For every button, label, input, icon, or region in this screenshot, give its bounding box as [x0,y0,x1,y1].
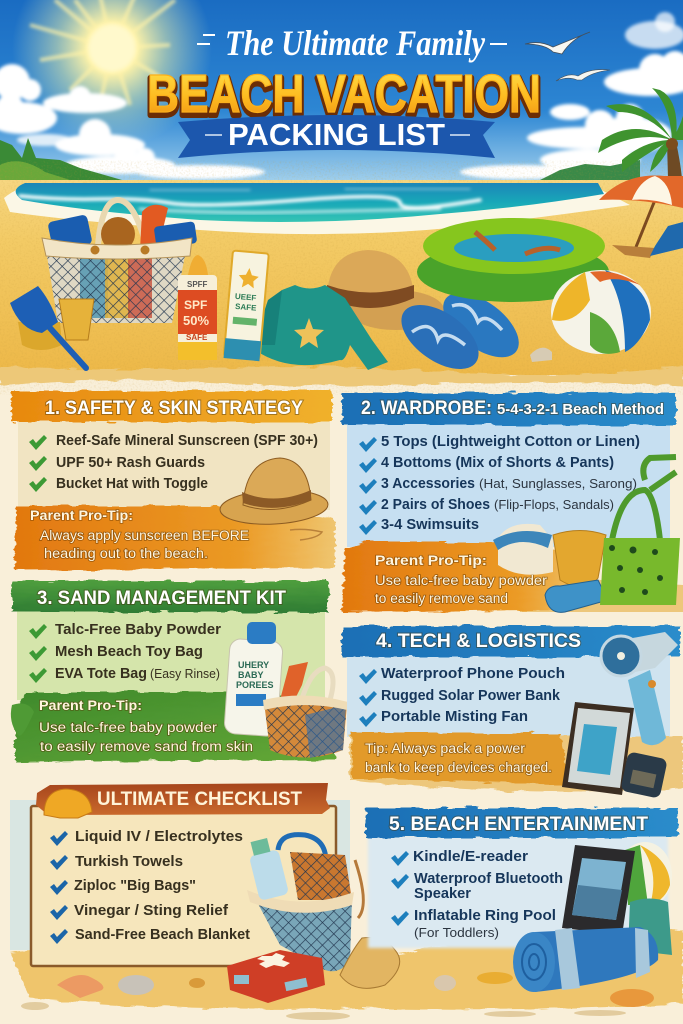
checklist: 3 Accessories [381,476,475,492]
icon: sunscreen bottle SPF 50: 50% [183,313,209,328]
checklist: Vinegar / Sting Relief [74,903,228,919]
heading plank: ULTIMATE CHECKLIST [97,789,302,810]
checklist: 3-4 Swimsuits [381,517,479,533]
icon: green tote bag [600,457,680,605]
icon: rolled towel tube [545,580,608,612]
icon: teal rash guard with star [253,285,388,370]
icon: bucket hat [219,458,329,540]
checklist: Speaker [414,886,471,902]
icon: baby powder bottle: UHERY [238,660,269,670]
icon: baby powder bottle: POREES [236,680,274,690]
panel: ultimate checklist [10,783,400,1003]
icon: sunscreen bottle SPF 50: SPFF [187,280,208,289]
icon: mesh bag with bottle [247,835,363,971]
icon: sun [12,0,212,148]
heading bar [366,808,678,838]
island left [0,138,122,180]
heading bar: 3. SAND MANAGEMENT KIT [37,588,286,609]
icon: seagull large [525,32,590,54]
icon: inflatable ring pool [417,218,609,302]
checklist: Sand-Free Beach Blanket [75,927,250,943]
icon: sunscreen bottle SPF 50 [178,255,217,360]
waves [20,189,480,213]
checklist: Kindle/E-reader [413,849,528,865]
checklist: 4 Bottoms (Mix of Shorts & Pants) [381,455,614,471]
beach items row [10,200,651,382]
checklist: Talc-Free Baby Powder [55,622,221,638]
icon: blue shovel and yellow buckets [10,286,94,368]
icon: rolled blue towel [513,927,658,992]
icon: beach umbrella and chair [599,176,683,258]
checklist: Ziploc "Big Bags" [74,878,196,894]
tip text [39,697,253,754]
tip text: Use talc-free baby powder [39,720,218,735]
checklist: 5 Tops (Lightweight Cotton or Linen) [381,434,640,450]
heading bar: 2. WARDROBE: [361,398,492,419]
bottom sand strip [10,929,683,1009]
blue back edge [10,800,350,950]
banner: packing list: PACKING LIST [228,117,445,152]
checklist [29,433,318,492]
tip text: bank to keep devices charged. [365,760,552,775]
background: sky [0,0,683,184]
tip box [342,542,683,612]
checklist [359,434,640,535]
checklist: Reef-Safe Mineral Sunscreen (SPF 30+) [56,433,318,449]
icon: orange shells and pebbles [434,972,654,1007]
icon: solar power bank [620,751,668,799]
panel body [347,655,670,737]
icon: scallop shell [44,789,92,818]
checklist: Liquid IV / Electrolytes [75,829,243,845]
tip text: heading out to the beach. [44,546,208,561]
icon: misting fan [601,632,678,745]
panel: 3 sand management kit [11,581,348,762]
tip text: Parent Pro-Tip: [30,507,133,523]
clouds right [460,12,683,179]
icon: small shells and pebble [57,975,205,998]
icon: baby powder bottle [224,622,283,737]
panel: 5 beach entertainment [366,808,678,1007]
checklist [359,666,565,727]
checklist [391,849,563,940]
checklist: Waterproof Phone Pouch [381,666,565,682]
icon: palm tree [598,88,683,178]
heading bar [12,391,332,422]
icon: beach ball [618,842,672,908]
tip text: to easily remove sand [375,591,508,606]
panel body [18,420,330,510]
clouds left [0,64,265,179]
icon: shovel and mesh basket [263,662,348,758]
sand edge [0,366,683,386]
title: BEACH VACATION: BEACH VACATION [147,67,541,127]
panel: 1 safety and skin strategy [12,391,335,570]
heading bar [342,393,676,425]
tip box [15,506,335,570]
checklist: (Hat, Sunglasses, Sarong) [479,476,637,491]
icon: sunscreen bottle SPF 50: SPF [184,298,207,312]
tip text: Use talc-free baby powder [375,573,548,588]
icon: beach ball [551,270,651,354]
icon: sunscreen bottle SPF 50: SAFE [186,333,208,342]
heading bar: 5-4-3-2-1 Beach Method [497,401,664,418]
foam [4,184,630,234]
panel: 4 tech and logistics [342,626,683,799]
checklist: 2 Pairs of Shoes [381,497,490,513]
sand beach [0,180,683,375]
tip text: Always apply sunscreen BEFORE [40,528,249,543]
checklist: Portable Misting Fan [381,709,528,725]
icon: e-reader tablet [562,845,635,935]
heading bar: 5. BEACH ENTERTAINMENT [389,814,648,835]
tip text: Parent Pro-Tip: [375,552,487,568]
checklist: (Flip-Flops, Sandals) [494,497,614,512]
checklist [29,622,221,683]
heading bar: 1. SAFETY & SKIN STRATEGY [45,398,303,419]
icon: first aid kit [227,950,325,1003]
icon: sunscreen tube [224,250,269,361]
title: BEACH VACATION: BEACH VACATION [147,64,541,124]
parchment board [31,806,336,966]
island right [540,160,640,180]
checklist: Rugged Solar Power Bank [381,688,561,704]
icon: sunscreen tube: UEEF [235,292,257,303]
icon: blue flip flops [390,280,530,382]
panel: 2 wardrobe [342,393,683,612]
checklist: Turkish Towels [75,854,183,870]
panel body [368,836,668,948]
icon: straw hat [327,250,444,330]
panel body [17,610,325,700]
checklist: EVA Tote Bag [55,666,147,682]
title: script line: The Ultimate Family [225,23,486,63]
tip box [11,692,335,762]
checklist: (Easy Rinse) [150,666,220,681]
checklist: (For Toddlers) [414,925,499,940]
tip text: Parent Pro-Tip: [39,697,142,713]
heading plank [36,783,330,815]
icon: green cup [628,898,672,955]
checklist [50,829,250,944]
icon: beach pebbles [530,348,552,362]
icon: large seashell [340,938,400,988]
tip text [375,552,548,606]
tip text [365,741,552,775]
heading bar [12,581,328,612]
sea [16,183,604,222]
sand grain texture [0,180,683,375]
checklist: Bucket Hat with Toggle [56,476,208,492]
checklist: Waterproof Bluetooth [414,871,563,887]
icon: seagull small [556,70,610,81]
panel body [347,422,670,547]
icon: folded hat and sand bucket [493,524,606,587]
checklist: Mesh Beach Toy Bag [55,644,203,660]
heading bar [342,626,680,657]
tip text [30,507,249,561]
tip box [350,733,683,792]
checklist: UPF 50+ Rash Guards [56,455,205,471]
icon: sunscreen tube: SAFE [235,302,257,313]
bottom sand smudges [21,1002,626,1020]
heading bar: 4. TECH & LOGISTICS [376,631,581,652]
tip text: Tip: Always pack a power [365,741,526,756]
banner: packing list [178,115,495,158]
icon: mesh beach bag [42,200,197,323]
icon: baby powder bottle: BABY [238,670,264,680]
checklist: Inflatable Ring Pool [414,908,556,924]
tip text: to easily remove sand from skin [40,739,253,754]
icon: phone in waterproof pouch [562,702,634,795]
